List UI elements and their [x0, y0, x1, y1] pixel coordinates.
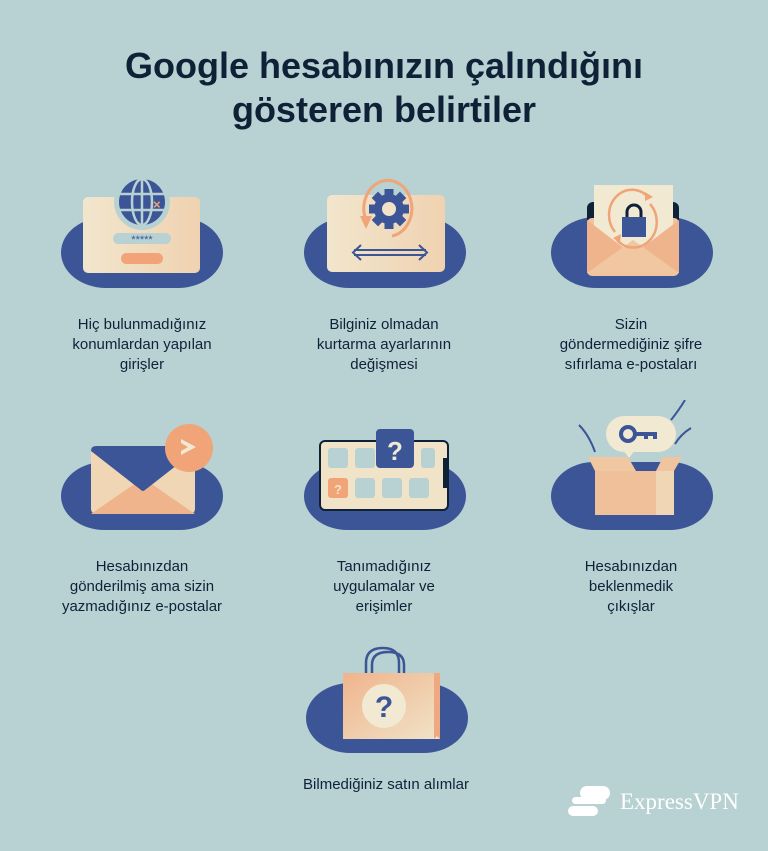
icon: login card with globe: ***** [131, 234, 153, 246]
label: konumlardan yapılan [72, 336, 212, 353]
label [333, 558, 435, 615]
icon: shopping bag with question: ? [375, 691, 393, 724]
panel: unknown purchases [303, 646, 469, 793]
title [125, 45, 643, 130]
label [62, 558, 222, 615]
label: Tanımadığınız [337, 558, 431, 575]
label: beklenmedik [589, 578, 673, 595]
panel: unexpected logouts [551, 400, 713, 615]
icon: envelope with lock [551, 185, 713, 288]
label [72, 316, 212, 373]
label: çıkışlar [607, 598, 655, 615]
icon: login card with globe [61, 179, 223, 288]
panel: sent emails [61, 424, 223, 615]
icon: tablet with question: ? [387, 436, 403, 466]
label [317, 316, 451, 373]
label: uygulamalar ve [333, 578, 435, 595]
label: girişler [120, 356, 164, 373]
title: gösteren belirtiler [232, 89, 536, 130]
label: Sizin [615, 316, 647, 333]
label: gönderilmiş ama sizin [70, 578, 214, 595]
logo: ExpressVPN: ExpressVPN [620, 789, 739, 814]
label: sıfırlama e-postaları [565, 356, 697, 373]
icon: shopping bag with question [306, 646, 468, 753]
label: Bilginiz olmadan [329, 316, 439, 333]
label: erişimler [356, 598, 412, 615]
logo: ExpressVPN [568, 786, 739, 816]
icon: open box with key [551, 400, 713, 530]
icon: tablet with question [304, 429, 466, 530]
label: değişmesi [350, 356, 418, 373]
label: göndermediğiniz şifre [560, 336, 702, 353]
title: Google hesabınızın çalındığını [125, 45, 643, 86]
icon: login card with globe: × [153, 197, 161, 212]
label [585, 558, 677, 615]
label: kurtarma ayarlarının [317, 336, 451, 353]
panel: unknown locations [61, 179, 223, 373]
label [560, 316, 702, 373]
label: Bilmediğiniz satın alımlar [303, 776, 469, 793]
label: Hiç bulunmadığınız [78, 316, 206, 333]
label: Hesabınızdan [96, 558, 188, 575]
icon: tablet with question: ? [334, 482, 342, 497]
label: yazmadığınız e-postalar [62, 598, 222, 615]
label: Hesabınızdan [585, 558, 677, 575]
panel: password reset emails [551, 185, 713, 373]
panel: recovery settings [304, 178, 466, 373]
panel: unknown apps [304, 429, 466, 615]
icon: envelope with send badge [61, 424, 223, 530]
icon: settings card with gear [304, 178, 466, 288]
